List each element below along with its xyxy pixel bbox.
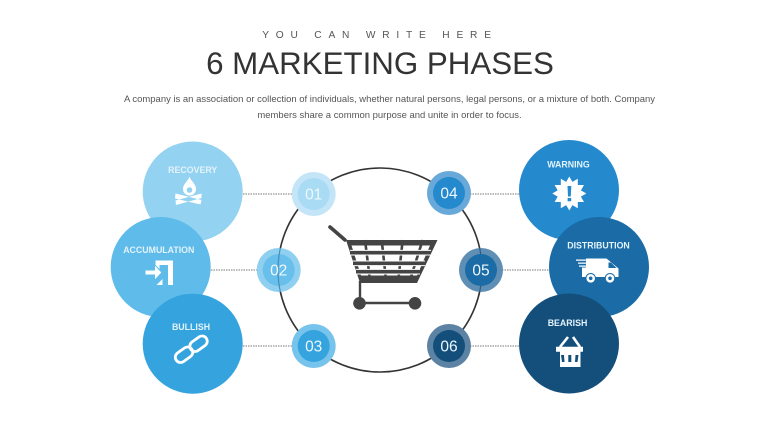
marker 01: 01 bbox=[305, 186, 322, 204]
panel: recovery bbox=[143, 142, 243, 242]
marker 06: 06 bbox=[440, 338, 458, 356]
eyebrow text: YOU CAN WRITE HERE bbox=[262, 30, 498, 41]
marker 04 bbox=[427, 171, 471, 215]
description text: members share a common purpose and unite in order to focus. bbox=[257, 110, 522, 121]
marker 03: 03 bbox=[305, 338, 322, 356]
panel: distribution: DISTRIBUTION bbox=[567, 241, 630, 251]
description text bbox=[124, 94, 655, 121]
icon: broken chain bbox=[173, 334, 209, 365]
marker 02: 02 bbox=[270, 262, 287, 280]
panel: recovery: RECOVERY bbox=[168, 165, 217, 175]
title: 6 MARKETING PHASES bbox=[206, 46, 554, 81]
marker 04: 04 bbox=[440, 186, 458, 202]
description text: A company is an association or collection of individuals, whether natural persons, legal persons, or a mixture of both. Company bbox=[124, 94, 655, 105]
icon: basket bbox=[556, 337, 583, 367]
marker 01 bbox=[292, 172, 336, 216]
icon: shopping cart bbox=[330, 227, 438, 310]
icon: delivery van bbox=[576, 258, 618, 283]
icon: warning burst bbox=[552, 176, 586, 210]
panel: warning: WARNING bbox=[547, 160, 590, 170]
marker 05 bbox=[459, 248, 503, 292]
icon: sign in bbox=[145, 260, 173, 285]
panel: bullish bbox=[143, 294, 243, 394]
panel: bearish bbox=[519, 294, 619, 394]
panel: accumulation bbox=[111, 217, 211, 317]
panel: distribution bbox=[549, 217, 649, 317]
panel: accumulation: ACCUMULATION bbox=[123, 245, 194, 255]
marker 02 bbox=[257, 248, 301, 292]
panel: bullish: BULLISH bbox=[172, 322, 210, 332]
panel: warning bbox=[519, 140, 619, 240]
central ring bbox=[278, 168, 482, 372]
marker 06 bbox=[427, 324, 471, 368]
marker 03 bbox=[292, 324, 336, 368]
panel: bearish: BEARISH bbox=[548, 318, 587, 328]
icon: campfire bbox=[175, 176, 202, 205]
marker 05: 05 bbox=[472, 262, 490, 280]
